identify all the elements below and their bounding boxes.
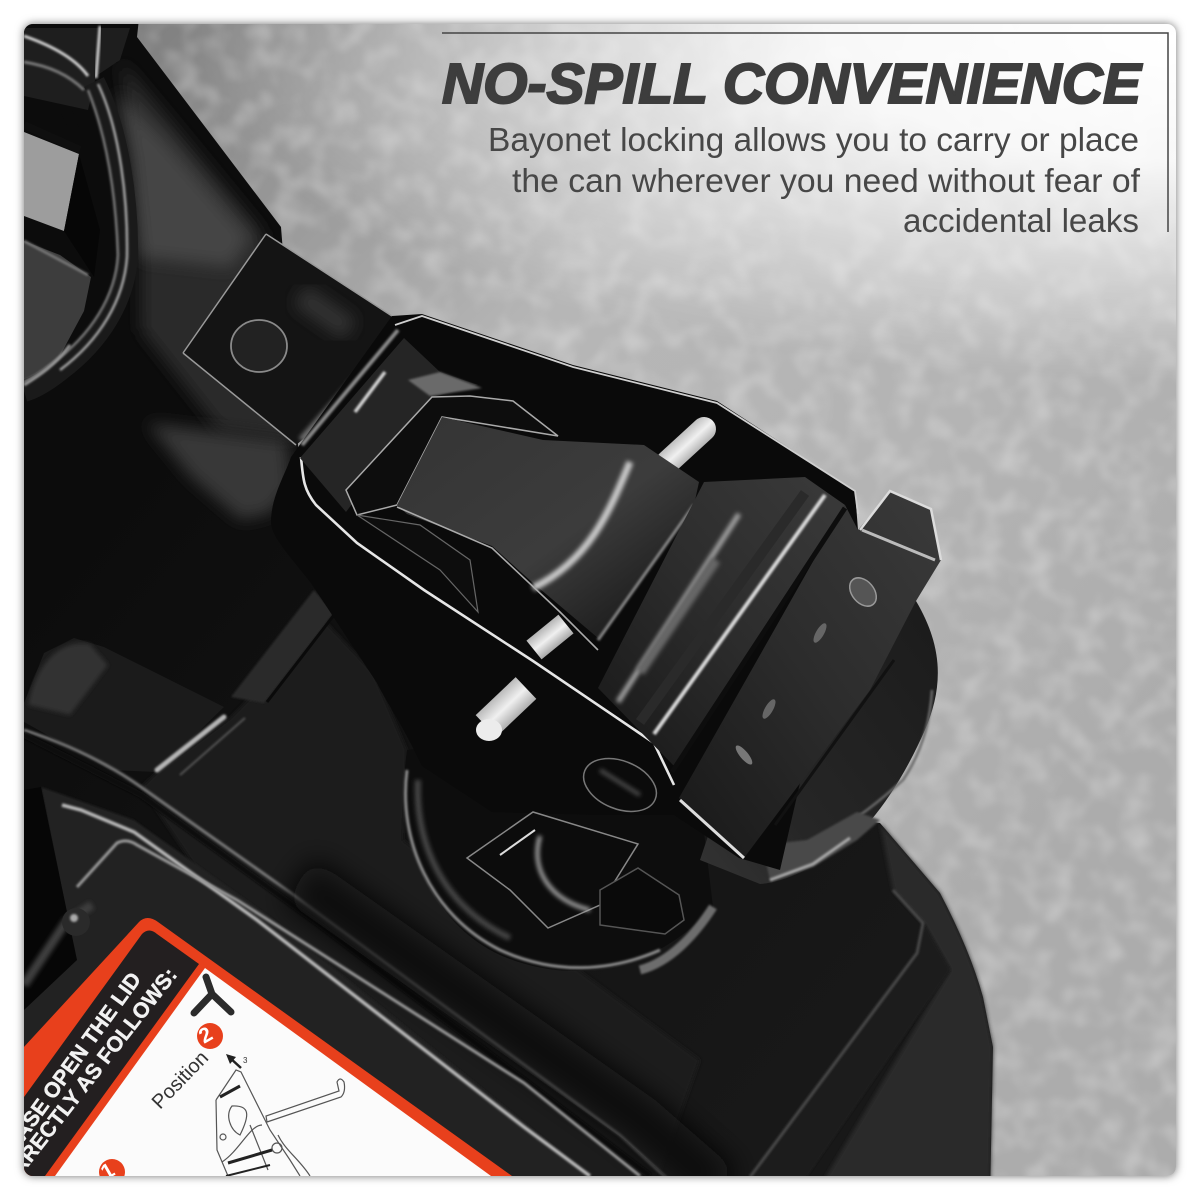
arrow three: [226, 1054, 248, 1068]
latch line drawing: [216, 1070, 345, 1176]
latch assembly: [183, 234, 941, 934]
lower clip: [467, 812, 684, 934]
position two label: 2: [195, 1023, 217, 1048]
description text: Bayonet locking allows you to carry or place: [488, 121, 1139, 158]
upper pin: [668, 429, 704, 462]
handle ring: [24, 82, 127, 391]
handle openings: [24, 110, 100, 381]
upper body sheen: [117, 60, 296, 520]
lid cap: [700, 560, 938, 884]
heading frame: [442, 33, 1168, 232]
position two label: Position: [148, 1047, 213, 1113]
mounting tab: [183, 234, 400, 445]
latch opening: [346, 396, 558, 612]
handle bar: [24, 26, 130, 110]
middle pin: [534, 624, 566, 650]
description text: [488, 121, 1141, 239]
position two label: [148, 1023, 223, 1113]
title: NO-SPILL CONVENIENCE: [442, 52, 1143, 116]
ratchet strip: [598, 477, 845, 766]
description text: the can wherever you need without fear of: [512, 162, 1141, 199]
rivet: [576, 749, 664, 821]
position one marker: [97, 1158, 125, 1185]
sticker recess: [0, 730, 720, 1200]
arrow three: 3: [243, 1056, 248, 1065]
right shoulder bands: [750, 823, 993, 1200]
embossed panel: [24, 590, 700, 1200]
lower pin: [476, 688, 526, 741]
latch frame: [271, 314, 858, 870]
locking lever: [397, 417, 699, 650]
icon: Y key: [194, 977, 231, 1013]
notched lock plate: [672, 491, 941, 858]
description text: accidental leaks: [903, 202, 1139, 239]
warning sticker: [0, 918, 512, 1200]
filler neck ring: [404, 740, 713, 971]
